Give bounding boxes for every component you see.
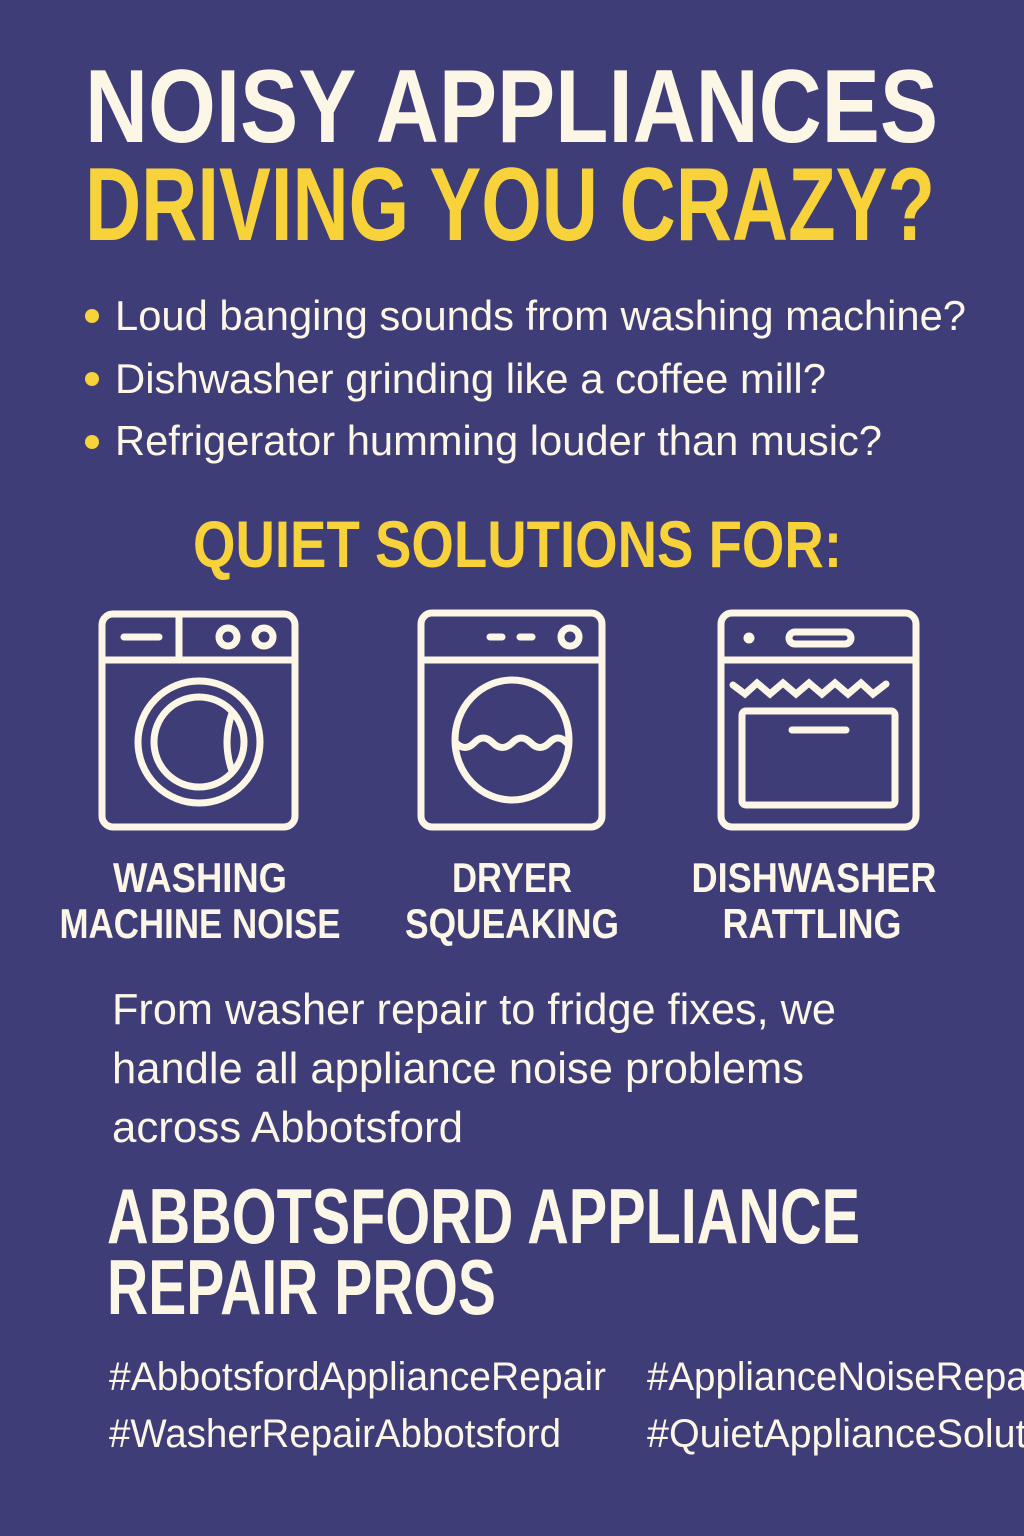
- bullet list: Refrigerator humming louder than music?: [115, 417, 882, 464]
- icon: dryer: [421, 613, 602, 827]
- title: [85, 49, 938, 263]
- labels: DRYER: [452, 854, 572, 901]
- brand name: REPAIR PROS: [107, 1243, 496, 1331]
- labels: DISHWASHER: [692, 854, 936, 901]
- labels: SQUEAKING: [405, 900, 619, 947]
- labels: RATTLING: [722, 900, 902, 947]
- labels: MACHINE NOISE: [60, 900, 340, 947]
- bullet list: Dishwasher grinding like a coffee mill?: [115, 355, 826, 402]
- brand name: [107, 1172, 860, 1331]
- hashtags: #WasherRepairAbbotsford: [109, 1412, 561, 1456]
- hashtags: [109, 1355, 1024, 1456]
- paragraph: [112, 985, 836, 1152]
- bullet list: [85, 292, 966, 464]
- section heading: QUIET SOLUTIONS FOR:: [193, 507, 842, 581]
- hashtags: #AbbotsfordApplianceRepair: [109, 1355, 606, 1399]
- icon: dishwasher: [721, 613, 916, 827]
- paragraph: handle all appliance noise problems: [112, 1044, 804, 1093]
- paragraph: across Abbotsford: [112, 1103, 463, 1152]
- labels: WASHING: [113, 854, 287, 901]
- icon: washing machine: [102, 614, 295, 827]
- bullet list: Loud banging sounds from washing machine?: [115, 292, 966, 339]
- paragraph: From washer repair to fridge fixes, we: [112, 985, 836, 1034]
- labels: [60, 854, 936, 947]
